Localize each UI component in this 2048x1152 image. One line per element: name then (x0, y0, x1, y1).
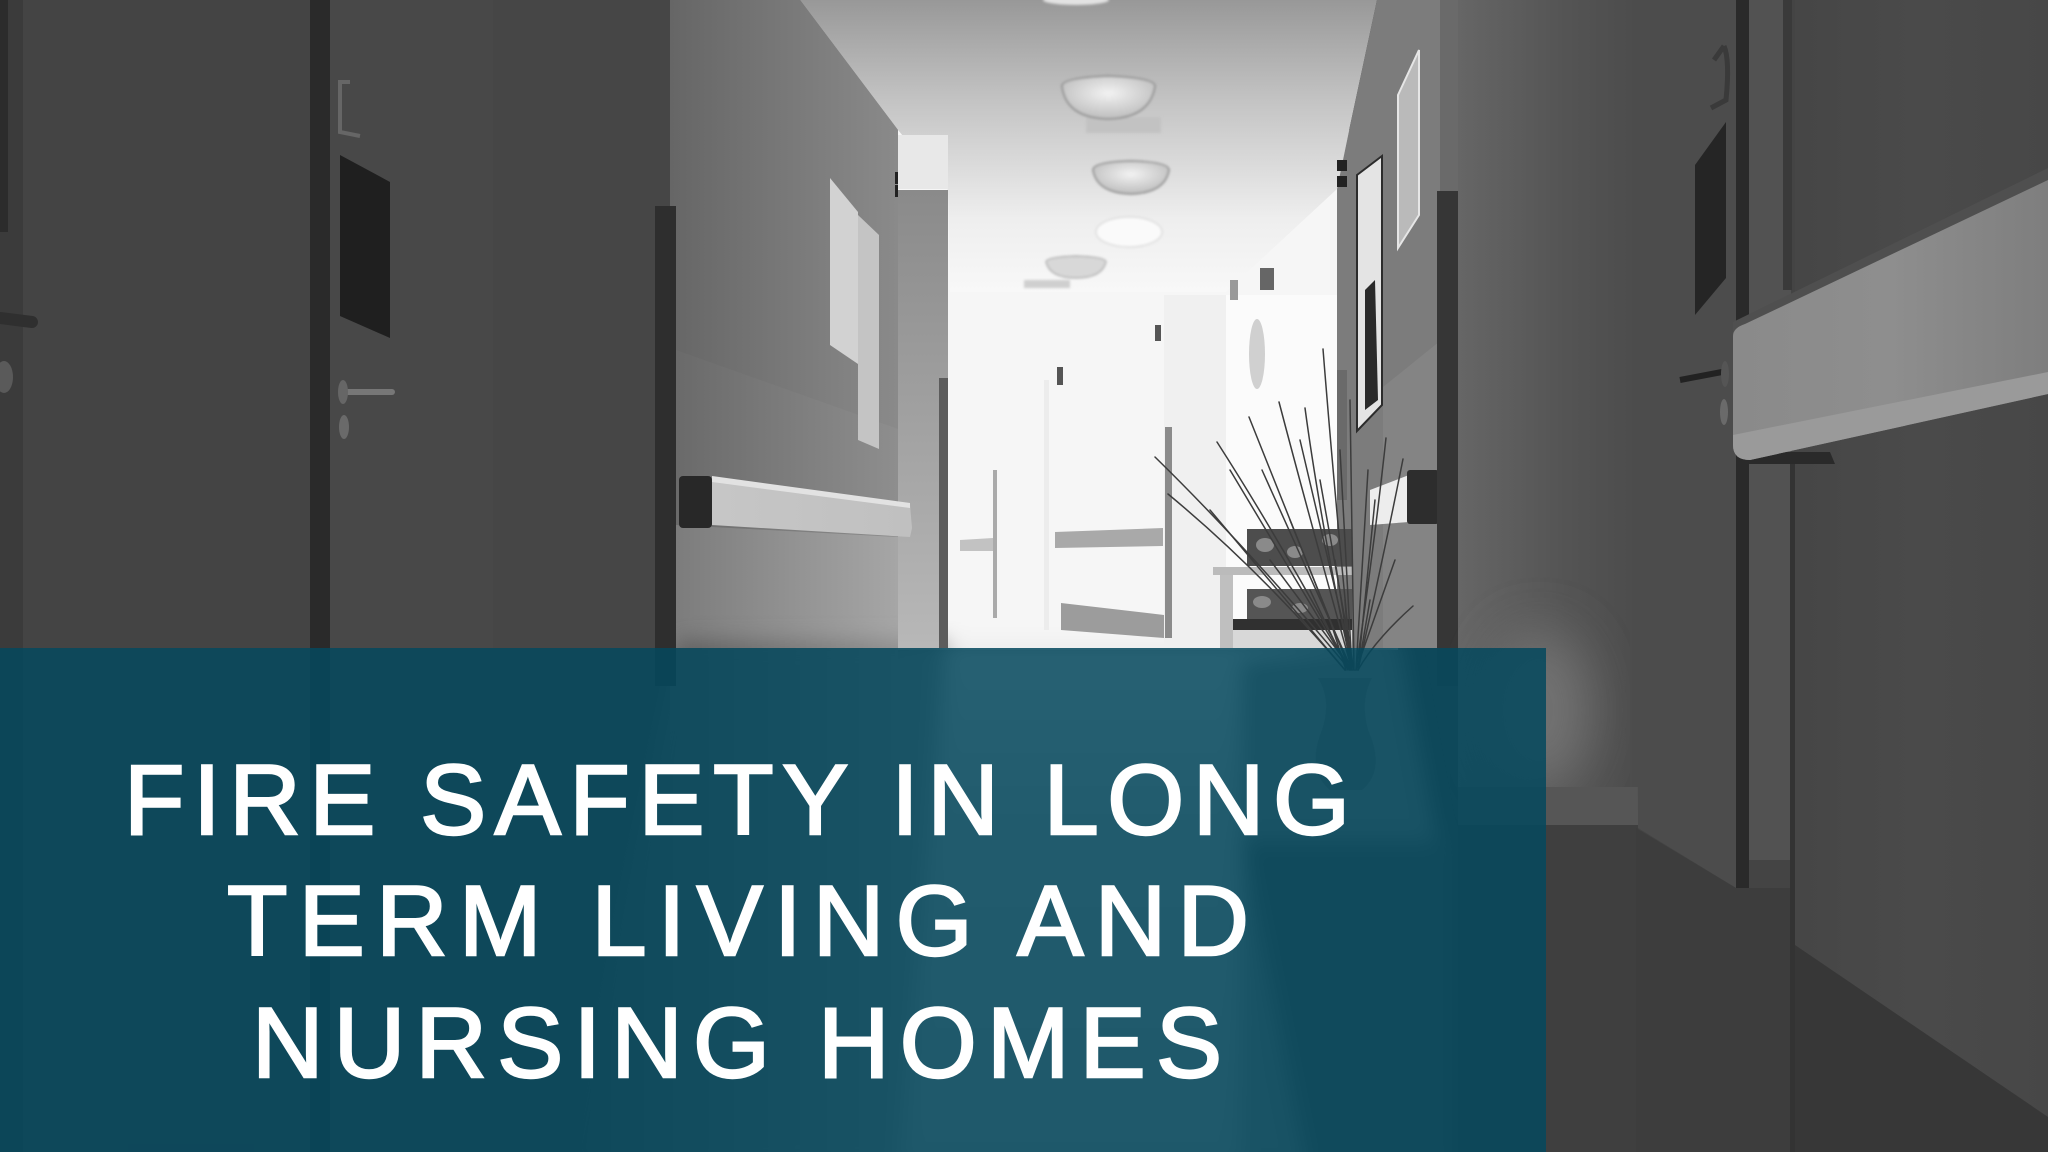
left wall post and handrail (655, 206, 912, 686)
title line 2: TERM LIVING AND (227, 865, 1249, 976)
plant in vase (1155, 349, 1413, 790)
title line 1: FIRE SAFETY IN LONG (124, 744, 1350, 855)
right foreground panel (1795, 0, 2048, 1152)
right wall and doorway (1440, 0, 1638, 1152)
far corridor details (898, 190, 1351, 648)
bench (1213, 529, 1352, 648)
left foreground doors (0, 0, 670, 1152)
left corridor wall (670, 0, 905, 1152)
teal title panel (0, 648, 1546, 1152)
right corridor wall and pictures (1337, 0, 1440, 648)
right door (1636, 0, 1796, 1152)
title line 3: NURSING HOMES (252, 987, 1222, 1098)
large foreground handrail (1733, 168, 2048, 464)
right post (1437, 191, 1458, 686)
ceiling with lights (800, 0, 1377, 292)
title (124, 744, 1350, 1098)
bright far corridor and floor (560, 130, 1450, 1152)
